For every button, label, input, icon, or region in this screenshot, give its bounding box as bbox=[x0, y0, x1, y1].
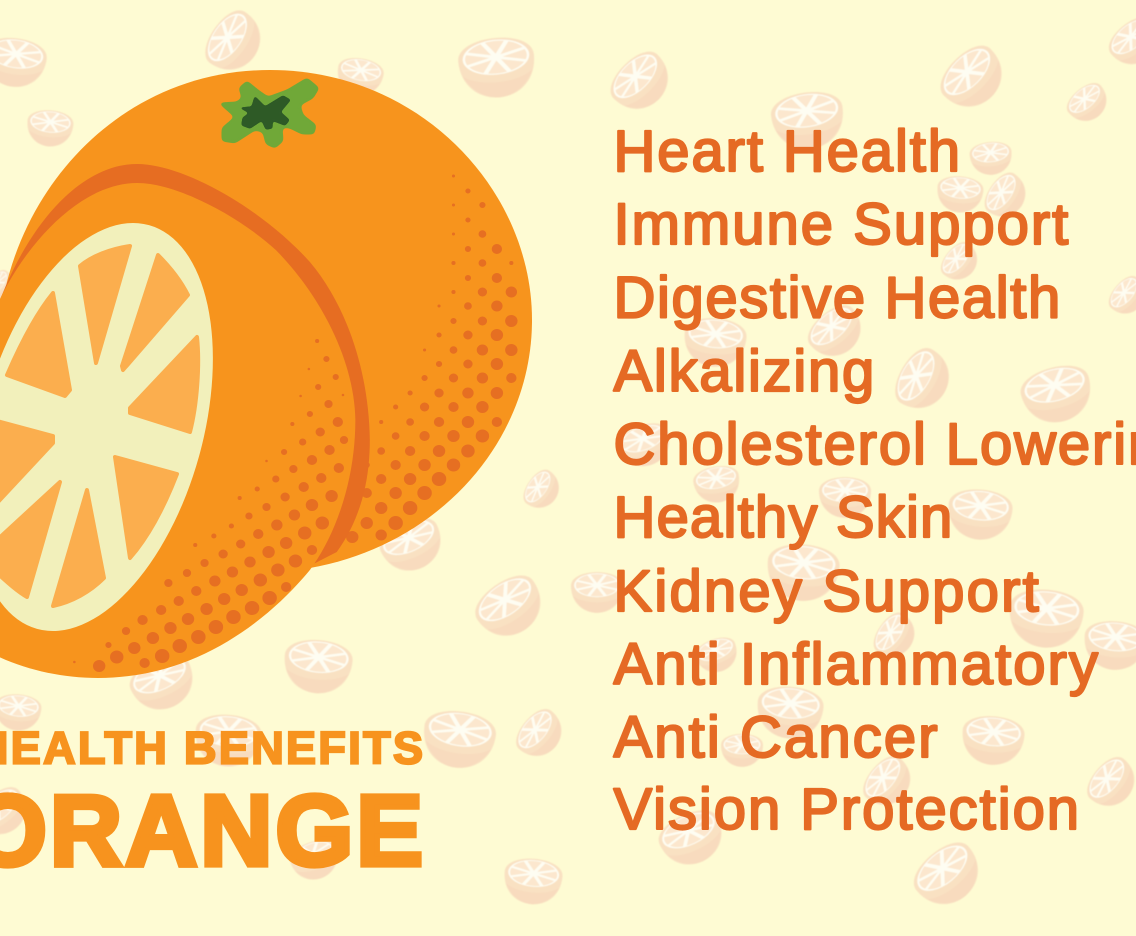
illustration: main orange with cut half bbox=[0, 70, 532, 678]
cut face segments bbox=[0, 246, 198, 606]
rind, cut half body and halftone dots bbox=[0, 164, 511, 678]
cut face pith bbox=[0, 196, 255, 658]
halftone dots on whole orange bbox=[352, 176, 511, 537]
benefit item: Alkalizing bbox=[614, 339, 876, 404]
cut half body bbox=[0, 183, 355, 678]
benefit item: Vision Protection bbox=[614, 777, 1081, 842]
icon: dark calyx centre bbox=[241, 96, 290, 129]
icon: green calyx bbox=[219, 78, 319, 148]
benefit item: Immune Support bbox=[614, 192, 1070, 257]
benefit item: Heart Health bbox=[614, 119, 962, 184]
benefit item: Anti Inflammatory bbox=[614, 632, 1100, 697]
benefit item: Kidney Support bbox=[614, 559, 1041, 624]
whole orange body bbox=[0, 70, 532, 600]
benefit item: Digestive Health bbox=[614, 266, 1062, 330]
benefit item: Healthy Skin bbox=[614, 485, 954, 550]
dark rind band of cut half bbox=[0, 164, 370, 570]
benefits list bbox=[614, 119, 1136, 842]
benefit item: Anti Cancer bbox=[614, 705, 940, 770]
halftone dots on cut half bbox=[74, 341, 344, 666]
